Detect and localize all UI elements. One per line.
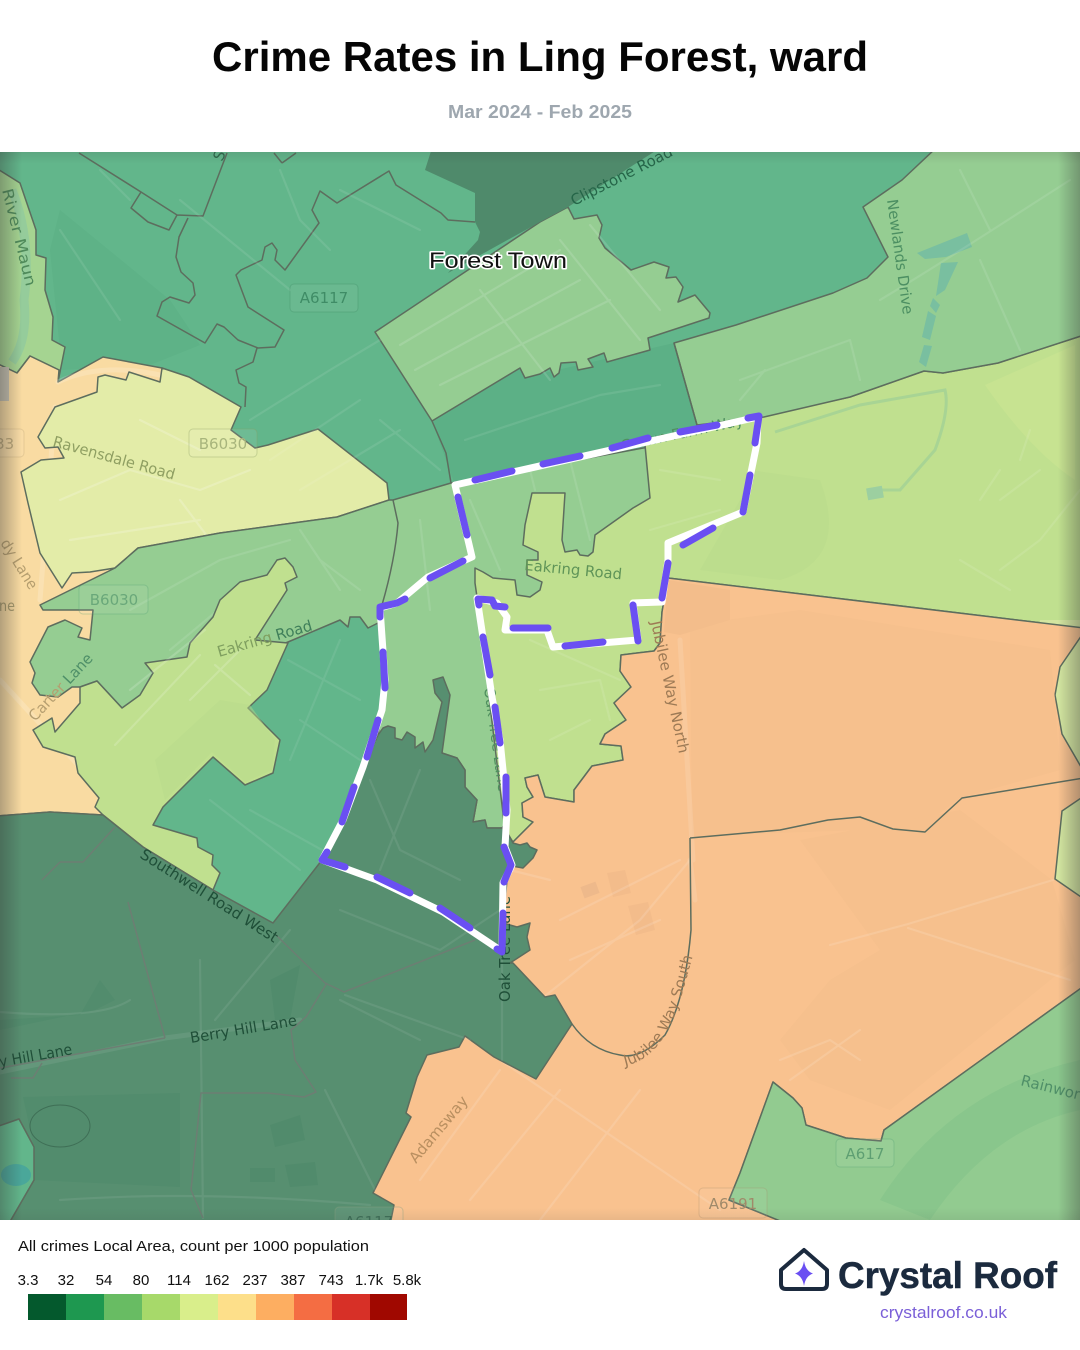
region: ward and eastern pale green bbox=[475, 335, 1080, 842]
label: Ravensdale Road: Ravensdale Road bbox=[51, 433, 177, 484]
badge: A6117 bottom: A6117 bbox=[345, 1213, 393, 1231]
river Maun bbox=[12, 190, 26, 362]
place label: Forest Town: Forest Town bbox=[429, 248, 567, 273]
icon: house with star bbox=[781, 1250, 827, 1289]
map edge vignette bbox=[0, 152, 1080, 1220]
logo: Crystal Roof bbox=[781, 1250, 1058, 1322]
legend scale labels: 743 bbox=[318, 1272, 344, 1289]
badge: A617: A617 bbox=[846, 1145, 884, 1163]
ward boundary lines north-west bbox=[79, 153, 697, 483]
region: east edge pale pockets bbox=[1040, 620, 1080, 910]
website: crystalroof.co.uk bbox=[880, 1304, 1008, 1322]
legend scale labels: 114 bbox=[167, 1272, 191, 1289]
region: top centre dark green bbox=[425, 148, 660, 273]
badge: B6033 clipped bbox=[0, 429, 24, 457]
label: Eakring Road west: Eakring Road bbox=[215, 617, 314, 661]
region: north-west river strip bbox=[0, 168, 65, 382]
legend scale labels: 54 bbox=[96, 1272, 112, 1289]
legend scale labels: 3.3 bbox=[18, 1272, 38, 1289]
label: Jubilee Way North: Jubilee Way North bbox=[647, 618, 693, 755]
badge: B6030 upper: B6030 bbox=[199, 435, 247, 453]
legend scale labels bbox=[18, 1272, 422, 1289]
label: Berry Hill Lane: Berry Hill Lane bbox=[189, 1011, 298, 1047]
legend scale labels: 237 bbox=[242, 1272, 268, 1289]
region: south-east orange bbox=[360, 578, 1080, 1225]
road badges bbox=[0, 284, 894, 1235]
label: Adamsway: Adamsway bbox=[405, 1092, 472, 1167]
region: central light green bbox=[30, 445, 660, 828]
legend scale labels: 32 bbox=[58, 1272, 74, 1289]
badge: B6030 upper bbox=[189, 429, 257, 457]
region: south-west dark green bbox=[0, 677, 572, 1225]
logo wordmark: Crystal Roof bbox=[838, 1255, 1058, 1296]
legend scale labels: 162 bbox=[204, 1272, 230, 1289]
legend scale labels: 1.7k bbox=[355, 1272, 384, 1289]
label: S: S bbox=[209, 147, 230, 164]
subtitle: date range: Mar 2024 - Feb 2025 bbox=[448, 101, 632, 122]
badge: A617 bbox=[836, 1139, 894, 1167]
label: Carter Lane: Carter Lane bbox=[25, 650, 97, 725]
label: Oak Tree Lane north: Oak Tree Lane bbox=[480, 686, 512, 793]
region: Forest Town light green bbox=[375, 207, 710, 421]
badge: A6117 bottom bbox=[335, 1207, 403, 1235]
badge: A6191: A6191 bbox=[709, 1195, 757, 1213]
label: Southwell Road West: Southwell Road West bbox=[137, 845, 282, 946]
badge: A6117: A6117 bbox=[300, 289, 348, 307]
legend colour swatches bbox=[28, 1294, 407, 1320]
ward outline: Ling Forest bbox=[322, 416, 759, 952]
region: far south-west green corner bbox=[18, 1120, 35, 1209]
legend scale labels: 80 bbox=[133, 1272, 149, 1289]
label: Clipstone Road: Clipstone Road bbox=[568, 143, 676, 210]
legend scale labels: 387 bbox=[280, 1272, 306, 1289]
badge: B6030 lower: B6030 bbox=[90, 591, 138, 609]
title: Crime Rates in Ling Forest, ward bbox=[212, 33, 868, 80]
legend title: All crimes Local Area, count per 1000 population bbox=[18, 1238, 369, 1255]
region: west orange strip bbox=[0, 355, 162, 815]
region: north-east light green bbox=[674, 148, 1080, 425]
label: Eakring Road ward: Eakring Road bbox=[524, 556, 623, 583]
label: Jubilee Way South: Jubilee Way South bbox=[624, 956, 692, 1070]
legend bbox=[18, 1238, 422, 1320]
lakes bbox=[917, 233, 972, 367]
label: Oak Tree Lane south: Oak Tree Lane bbox=[496, 896, 514, 1002]
badge: A6191 bbox=[699, 1188, 767, 1218]
label: Newlands Drive: Newlands Drive bbox=[883, 198, 917, 315]
badge: A6117 bbox=[290, 284, 358, 312]
road labels bbox=[0, 152, 1080, 1164]
legend scale labels: 5.8k bbox=[393, 1272, 422, 1289]
region: south-east green bbox=[729, 986, 1080, 1225]
badge: B6030 lower bbox=[79, 585, 148, 614]
region: west pale green bbox=[33, 558, 297, 890]
label: Crown Farm Way: Crown Farm Way bbox=[619, 411, 745, 455]
region: Ravensdale pale yellow bbox=[21, 368, 389, 588]
